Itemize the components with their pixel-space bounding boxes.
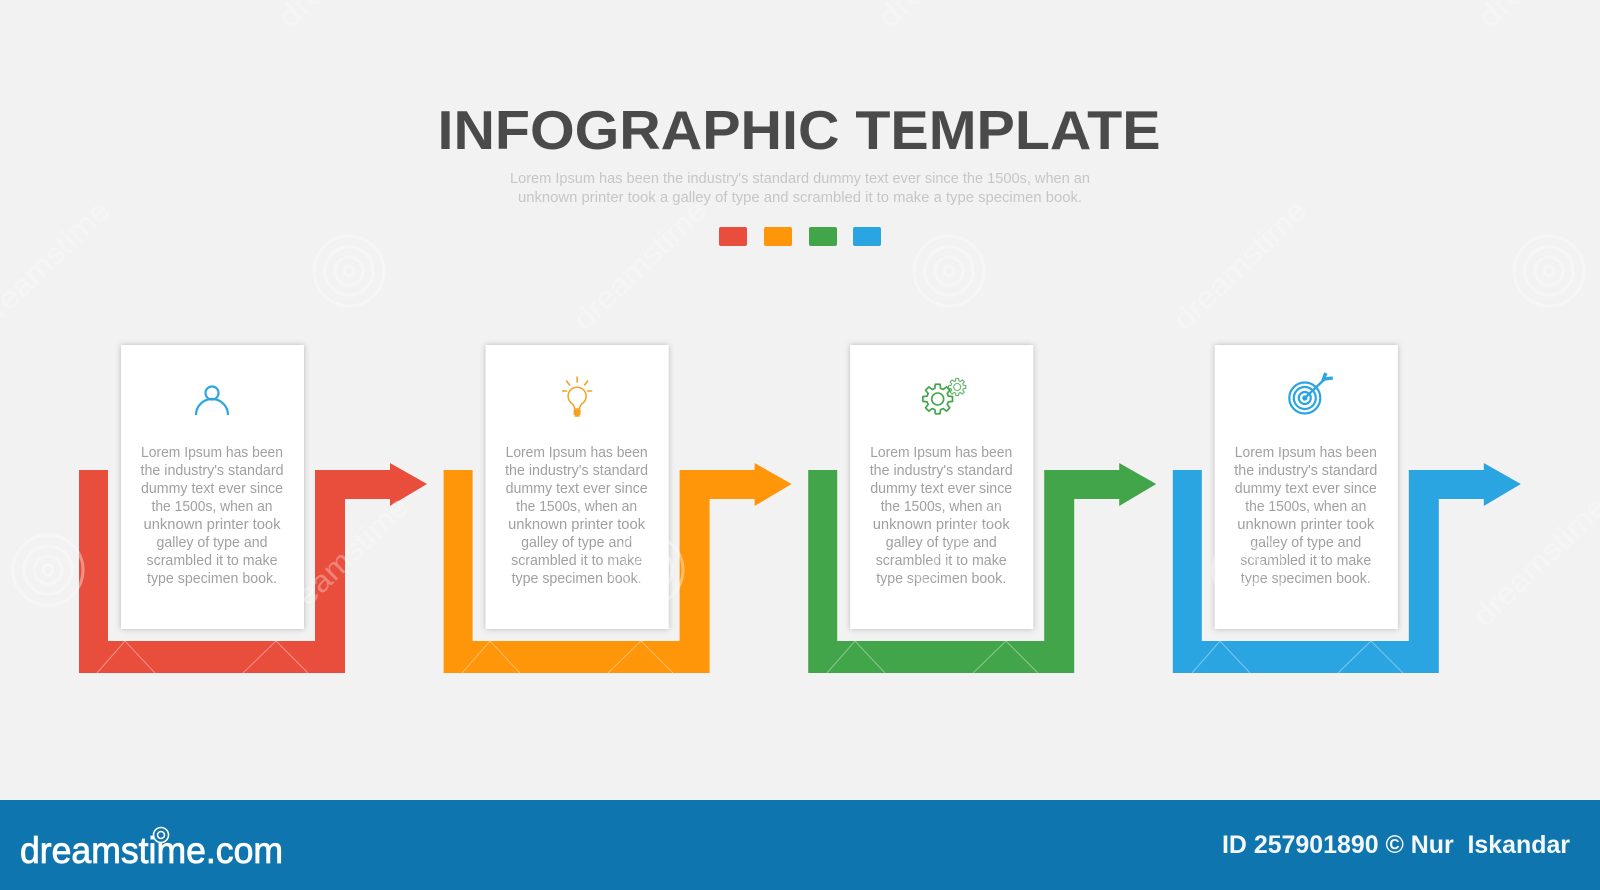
subtitle text: unknown printer took a galley of type and scrambled it to make a type specimen book. bbox=[518, 190, 1082, 206]
watermark overlay: dreamstime bbox=[1167, 194, 1314, 337]
text block: step 2 bbox=[505, 445, 648, 587]
text block: step 3: the 1500s, when an bbox=[881, 499, 1002, 515]
text block: step 2: scrambled it to make bbox=[511, 553, 642, 569]
text block: step 2: galley of type and bbox=[521, 535, 632, 551]
text block: step 4: Lorem Ipsum has been bbox=[1235, 445, 1377, 461]
card: step 2 bbox=[486, 345, 669, 629]
text block: step 2: type specimen book. bbox=[512, 571, 642, 587]
text block: step 4: scrambled it to make bbox=[1240, 553, 1371, 569]
text block: step 1: scrambled it to make bbox=[146, 553, 278, 569]
footer logo: dreamstime.com bbox=[20, 830, 283, 871]
text block: step 1: the industry's standard bbox=[140, 463, 284, 479]
footer bar bbox=[0, 800, 1600, 890]
text block: step 4: the industry's standard bbox=[1234, 463, 1377, 479]
text block: step 4: unknown printer took bbox=[1237, 517, 1375, 533]
text block: step 1: Lorem Ipsum has been bbox=[141, 445, 283, 461]
watermark overlay: dreamstime bbox=[269, 490, 416, 633]
text block: step 3: unknown printer took bbox=[873, 517, 1010, 533]
card: step 4 bbox=[1215, 345, 1398, 629]
text block: step 4: galley of type and bbox=[1250, 535, 1361, 551]
text block: step 1: the 1500s, when an bbox=[152, 499, 272, 515]
text block: step 4: dummy text ever since bbox=[1235, 481, 1377, 497]
footer image id and author: ID 257901890 © Nur Iskandar bbox=[1222, 831, 1570, 859]
text block: step 4: the 1500s, when an bbox=[1245, 499, 1366, 515]
arrow: green bbox=[808, 463, 1156, 673]
text block: step 3: galley of type and bbox=[886, 535, 997, 551]
text block: step 4 bbox=[1234, 445, 1377, 587]
text block: step 2: the industry's standard bbox=[505, 463, 648, 479]
subtitle text bbox=[510, 171, 1090, 206]
icon: light bulb bbox=[563, 377, 592, 416]
text block: step 1: unknown printer took bbox=[144, 517, 281, 533]
text block: step 4: type specimen book. bbox=[1241, 571, 1371, 587]
text block: step 2: dummy text ever since bbox=[506, 481, 648, 497]
arrow: orange bbox=[444, 463, 792, 673]
watermark overlay: dreamstime bbox=[567, 194, 714, 337]
watermark overlay: dreamstime bbox=[1467, 490, 1600, 633]
panel: step 3 green bbox=[808, 345, 1156, 673]
text block: step 1: galley of type and bbox=[156, 535, 268, 551]
text block: step 3 bbox=[870, 445, 1013, 587]
text block: step 3: scrambled it to make bbox=[876, 553, 1007, 569]
text block: step 1 bbox=[140, 445, 284, 587]
arrow: blue bbox=[1173, 463, 1521, 673]
text block: step 1: dummy text ever since bbox=[141, 481, 283, 497]
text block: step 2: unknown printer took bbox=[508, 517, 646, 533]
text block: step 3: the industry's standard bbox=[870, 463, 1013, 479]
arrow: red bbox=[79, 463, 427, 673]
watermark overlay: dreamstime bbox=[867, 490, 1014, 633]
text block: step 3: Lorem Ipsum has been bbox=[870, 445, 1012, 461]
text block: step 3: type specimen book. bbox=[876, 571, 1006, 587]
panel: step 2 orange bbox=[444, 345, 792, 673]
text block: step 2: the 1500s, when an bbox=[516, 499, 637, 515]
subtitle text: Lorem Ipsum has been the industry's standard dummy text ever since the 1500s, when an bbox=[510, 171, 1090, 187]
text block: step 1: type specimen book. bbox=[147, 571, 277, 587]
title: INFOGRAPHIC TEMPLATE bbox=[438, 99, 1160, 161]
card: step 3 bbox=[850, 345, 1033, 629]
colour legend squares bbox=[719, 227, 881, 246]
icon: target bbox=[1289, 373, 1333, 414]
icon: person bbox=[196, 386, 228, 415]
card: step 1 bbox=[121, 345, 304, 629]
icon: gears bbox=[923, 378, 966, 414]
text block: step 2: Lorem Ipsum has been bbox=[506, 445, 648, 461]
panel: step 1 red bbox=[79, 345, 427, 673]
text block: step 3: dummy text ever since bbox=[870, 481, 1012, 497]
watermark overlay bbox=[0, 0, 1600, 673]
panel: step 4 blue bbox=[1173, 345, 1521, 673]
